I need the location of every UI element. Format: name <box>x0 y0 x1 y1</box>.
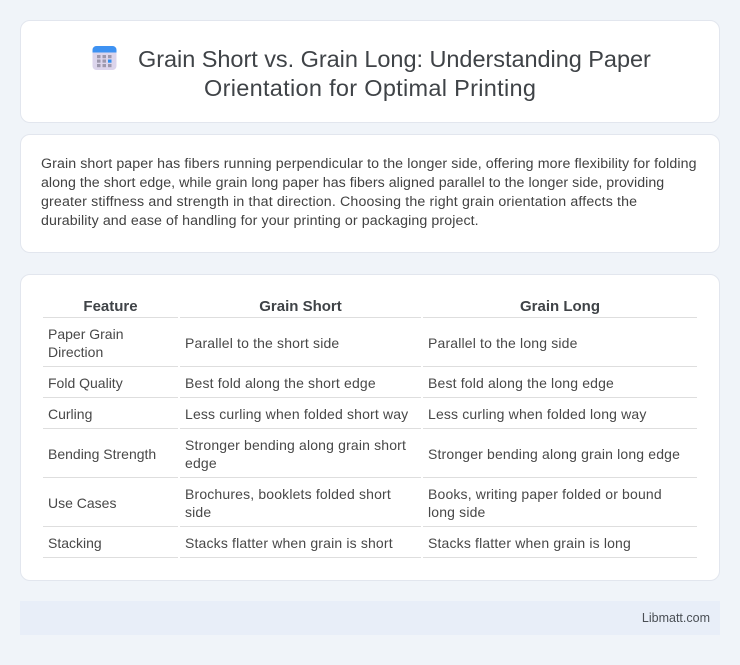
cell: grain long direction: Parallel to the long side <box>428 335 578 351</box>
intro text: durability and ease of handling for your printing or packaging project. <box>41 213 479 229</box>
intro text: greater stiffness and strength in that direction. Choosing the right grain orientation affects the <box>41 194 637 210</box>
table card <box>20 274 720 581</box>
row label: paper grain direction: Paper Grain <box>48 326 123 342</box>
row label: paper grain direction <box>48 326 123 360</box>
row label: paper grain direction: Direction <box>48 344 103 360</box>
cell: grain long bending: Stronger bending along grain long edge <box>428 446 680 462</box>
cell: grain long fold: Best fold along the long edge <box>428 375 614 391</box>
cell: grain long use cases <box>428 486 662 520</box>
row label: bending strength: Bending Strength <box>48 446 156 462</box>
comparison table <box>43 298 697 558</box>
row label: fold quality: Fold Quality <box>48 375 123 391</box>
title: Grain Short vs. Grain Long: Understanding Paper <box>138 46 651 72</box>
row label: curling: Curling <box>48 406 92 422</box>
cell: grain long stacking: Stacks flatter when grain is long <box>428 535 631 551</box>
row label: use cases: Use Cases <box>48 495 116 511</box>
intro card <box>20 134 720 253</box>
footer text: Libmatt.com <box>642 611 710 625</box>
cell: grain short use cases: side <box>185 504 211 520</box>
icon: calendar <box>92 46 116 70</box>
header card <box>20 20 720 123</box>
cell: grain long use cases: Books, writing paper folded or bound <box>428 486 662 502</box>
cell: grain short direction: Parallel to the short side <box>185 335 339 351</box>
intro text: along the short edge, while grain long paper has fibers aligned parallel to the longer side, providing <box>41 175 664 191</box>
title: Orientation for Optimal Printing <box>204 75 536 101</box>
intro text: Grain short paper has fibers running perpendicular to the longer side, offering more flexibility for folding <box>41 156 697 172</box>
cell: grain short use cases <box>185 486 391 520</box>
table header: Feature: Feature <box>83 298 138 315</box>
title <box>138 46 651 101</box>
intro text <box>41 156 697 229</box>
cell: grain short fold: Best fold along the short edge <box>185 375 376 391</box>
cell: grain short bending: Stronger bending along grain short <box>185 437 406 453</box>
cell: grain long use cases: long side <box>428 504 485 520</box>
row label: stacking: Stacking <box>48 535 102 551</box>
cell: grain short curling: Less curling when folded short way <box>185 406 408 422</box>
cell: grain short stacking: Stacks flatter when grain is short <box>185 535 393 551</box>
table header: Grain Short: Grain Short <box>259 298 342 315</box>
cell: grain long curling: Less curling when folded long way <box>428 406 647 422</box>
cell: grain short bending <box>185 437 406 471</box>
footer bar <box>20 601 720 635</box>
table header: Grain Long: Grain Long <box>520 298 600 315</box>
cell: grain short use cases: Brochures, booklets folded short <box>185 486 391 502</box>
cell: grain short bending: edge <box>185 455 217 471</box>
